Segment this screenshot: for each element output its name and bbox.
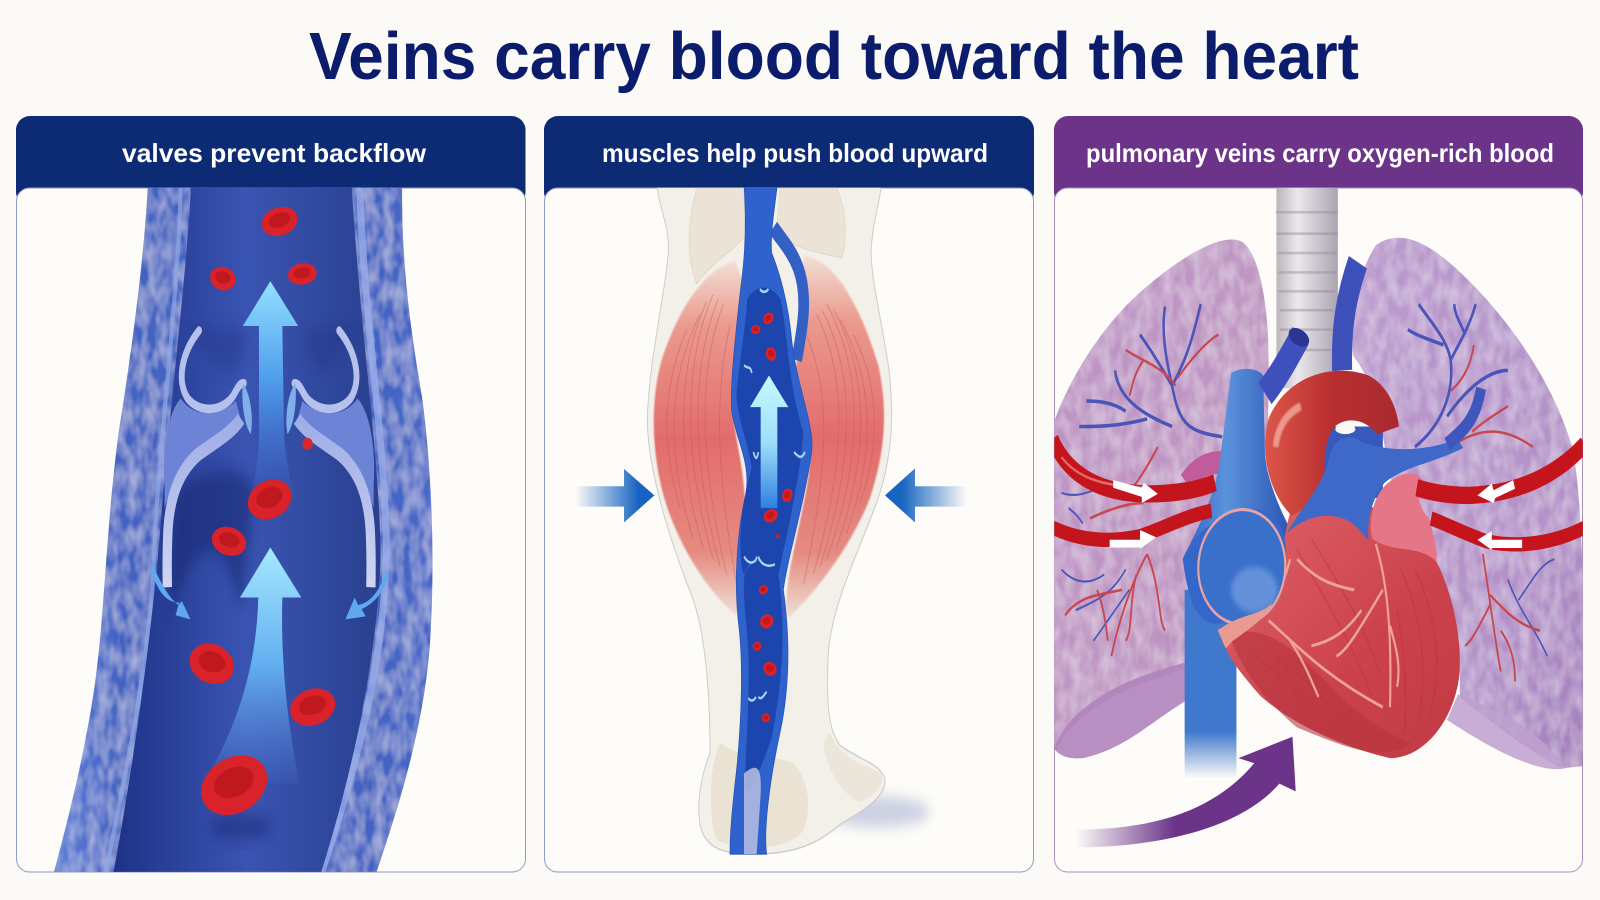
red blood cell 3 bbox=[288, 263, 317, 285]
outer wall highlight strips bbox=[105, 188, 181, 876]
valve root bbox=[164, 398, 241, 508]
right lung vessels blue bbox=[1408, 304, 1554, 656]
knee and bones bbox=[689, 188, 846, 284]
vena cava lower bbox=[1185, 590, 1236, 779]
lumen shadow under valves bbox=[169, 470, 255, 620]
panel header: valves bbox=[16, 116, 526, 206]
red blood cell 1 bbox=[262, 206, 298, 236]
cell bbox=[751, 325, 760, 334]
upward flow arrow bbox=[750, 376, 788, 508]
aorta highlight bbox=[1276, 406, 1301, 447]
main vein bbox=[730, 184, 812, 854]
cell bbox=[781, 487, 794, 504]
vein stub end bbox=[1287, 324, 1311, 350]
red blood cell 2 bbox=[210, 266, 236, 290]
foot shadow bbox=[823, 796, 930, 827]
compression arrow right bbox=[885, 468, 967, 522]
lumen upper dark area bbox=[198, 329, 338, 368]
right atrium highlight bbox=[1231, 567, 1277, 613]
panel: valves prevent backflow bbox=[16, 116, 526, 881]
toes bbox=[823, 733, 882, 802]
pulmonary veins right bbox=[1417, 444, 1585, 544]
cell bbox=[762, 311, 774, 326]
panel: pulmonary veins carry oxygen-rich blood bbox=[1051, 116, 1585, 872]
right lung bbox=[1352, 238, 1585, 768]
left pulmonary artery stub bbox=[1186, 462, 1222, 483]
cell bbox=[776, 534, 780, 538]
right lung vessels red bbox=[1451, 345, 1540, 682]
leg silhouette bbox=[647, 184, 892, 854]
upper right blue vessel bbox=[1342, 262, 1358, 370]
panel: muscles help push blood upward bbox=[544, 116, 1034, 872]
arch opening bbox=[1335, 424, 1355, 434]
red blood cell 4 bbox=[248, 480, 292, 520]
heart fibre lines bbox=[1251, 539, 1437, 733]
panel header: muscles bbox=[544, 116, 1034, 206]
left atrium bbox=[1371, 473, 1437, 562]
valve lower strip bbox=[167, 419, 241, 587]
pulmonary veins left bbox=[1052, 439, 1215, 540]
right atrium rim bbox=[1183, 509, 1286, 624]
trachea rings bbox=[1276, 212, 1338, 350]
white flow arrow lower right bbox=[1477, 531, 1522, 550]
backflow arrow left bbox=[150, 567, 190, 619]
red blood cell 6 bbox=[190, 644, 234, 684]
white flow arrow upper left bbox=[1113, 480, 1158, 503]
muscle fibres right bbox=[803, 304, 874, 585]
title: Veins carry blood toward the heart bbox=[309, 19, 1359, 94]
vein interior bbox=[737, 287, 803, 574]
aorta backing bbox=[1319, 427, 1383, 498]
valve left bbox=[164, 331, 252, 587]
cell bbox=[763, 660, 777, 678]
illustration: heart and lungs bbox=[1051, 184, 1585, 847]
coronary vessels bbox=[1219, 544, 1399, 707]
side branch vein bbox=[773, 228, 804, 360]
lower vein fade bbox=[744, 768, 761, 854]
muscle fibres left bbox=[667, 294, 737, 585]
left lung vessels blue bbox=[1061, 304, 1222, 641]
valve horn bbox=[182, 331, 244, 409]
left lung lower rim bbox=[1054, 661, 1197, 758]
panel body: muscles bbox=[544, 188, 1034, 872]
upper flow arrow bbox=[243, 281, 298, 503]
cell bbox=[765, 346, 777, 363]
cell bbox=[759, 613, 774, 630]
backflow arrow right bbox=[345, 572, 389, 619]
pulmonary artery blue bbox=[1286, 437, 1463, 541]
red blood cell 5 bbox=[212, 526, 246, 556]
vein wall bbox=[52, 182, 432, 881]
vein blood cells bbox=[751, 311, 794, 722]
vein interior lower bbox=[744, 561, 783, 794]
panel body: valves bbox=[16, 188, 526, 872]
heading: pulmonary veins carry oxygen-rich blood: pulmonary veins carry oxygen-rich blood bbox=[1086, 138, 1554, 168]
right lung lower rim bbox=[1447, 694, 1565, 769]
heart ventricles bbox=[1219, 501, 1460, 758]
right atrium opening bbox=[1193, 502, 1290, 632]
partly hidden blood cell bbox=[302, 438, 313, 450]
right calf muscle bbox=[787, 256, 884, 618]
brachiocephalic stub bbox=[1265, 336, 1301, 393]
compression arrow left bbox=[575, 469, 654, 522]
blood cell shadow bbox=[210, 814, 272, 840]
cell bbox=[758, 584, 768, 596]
panel body: pulmonary bbox=[1054, 188, 1582, 872]
white flow arrow lower left bbox=[1110, 530, 1156, 549]
heading: muscles help push blood upward: muscles help push blood upward bbox=[602, 138, 988, 168]
panel header: pulmonary bbox=[1054, 116, 1583, 206]
lower flow arrow bbox=[212, 548, 302, 778]
red blood cell 8 bbox=[201, 755, 268, 815]
heel and ankle bbox=[711, 743, 808, 848]
lumen bbox=[112, 182, 381, 881]
cell bbox=[763, 507, 778, 524]
red blood cell 7 bbox=[290, 688, 336, 726]
aorta arch bbox=[1265, 371, 1399, 516]
trachea bbox=[1276, 184, 1338, 388]
valve right bbox=[286, 331, 374, 587]
left lung bbox=[1051, 239, 1269, 751]
heart lower dark bbox=[1229, 632, 1411, 752]
vena cava upper bbox=[1183, 369, 1290, 610]
cell bbox=[762, 713, 770, 722]
left calf muscle bbox=[654, 261, 745, 615]
right pulmonary branch bbox=[1447, 388, 1481, 444]
left lung vessels red bbox=[1065, 335, 1219, 656]
cell bbox=[753, 642, 761, 651]
white flow arrow upper right bbox=[1477, 480, 1515, 503]
illustration: calf and vein bbox=[575, 184, 967, 854]
heading: valves prevent backflow: valves prevent backflow bbox=[122, 138, 427, 168]
outer wall highlight right bbox=[320, 188, 386, 876]
vein valves bbox=[744, 289, 805, 701]
heart lip bbox=[1218, 603, 1272, 648]
illustration: vein cross-section bbox=[52, 182, 432, 881]
purple flow arrow bbox=[1076, 737, 1296, 847]
valve lip bbox=[242, 383, 252, 434]
